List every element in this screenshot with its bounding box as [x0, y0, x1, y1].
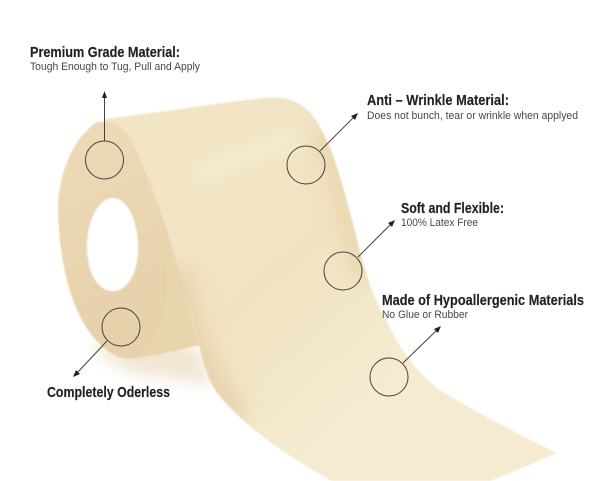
arrow up right	[320, 113, 358, 151]
callout circle: anti-wrinkle	[287, 113, 358, 184]
illustration: foam tape roll	[50, 90, 570, 481]
text: anti-wrinkle material: Anti – Wrinkle Material:	[367, 92, 509, 109]
text: soft and flexible	[401, 200, 504, 229]
roll body and unrolled ribbon	[105, 97, 557, 481]
text: premium grade material: Premium Grade Material:	[30, 44, 180, 61]
text: hypoallergenic materials: No Glue or Rubber	[382, 309, 468, 321]
text: soft and flexible: Soft and Flexible:	[401, 200, 504, 217]
text: completely oderless: Completely Oderless	[47, 384, 170, 401]
roll core hole	[87, 198, 138, 291]
callout circle: odorless	[73, 308, 140, 377]
arrow up	[102, 91, 107, 141]
text: premium grade material: Tough Enough to Tug, Pull and Apply	[30, 61, 200, 73]
text: anti-wrinkle material	[367, 92, 578, 122]
roll thickness band	[127, 133, 199, 359]
text: soft and flexible: 100% Latex Free	[401, 217, 478, 229]
text: anti-wrinkle material: Does not bunch, tear or wrinkle when applyed	[367, 110, 578, 122]
arrow down left	[73, 341, 107, 377]
roll end face	[58, 122, 167, 359]
arrow up right	[358, 220, 395, 257]
floor shadow under roll	[85, 345, 215, 385]
callout circle: premium grade	[86, 91, 124, 179]
callout circle: soft and flexible	[324, 220, 395, 290]
arrow up right	[403, 326, 441, 363]
callout circle: hypoallergenic	[370, 326, 441, 396]
text: hypoallergenic materials	[382, 292, 584, 321]
text: premium grade material	[30, 44, 200, 73]
